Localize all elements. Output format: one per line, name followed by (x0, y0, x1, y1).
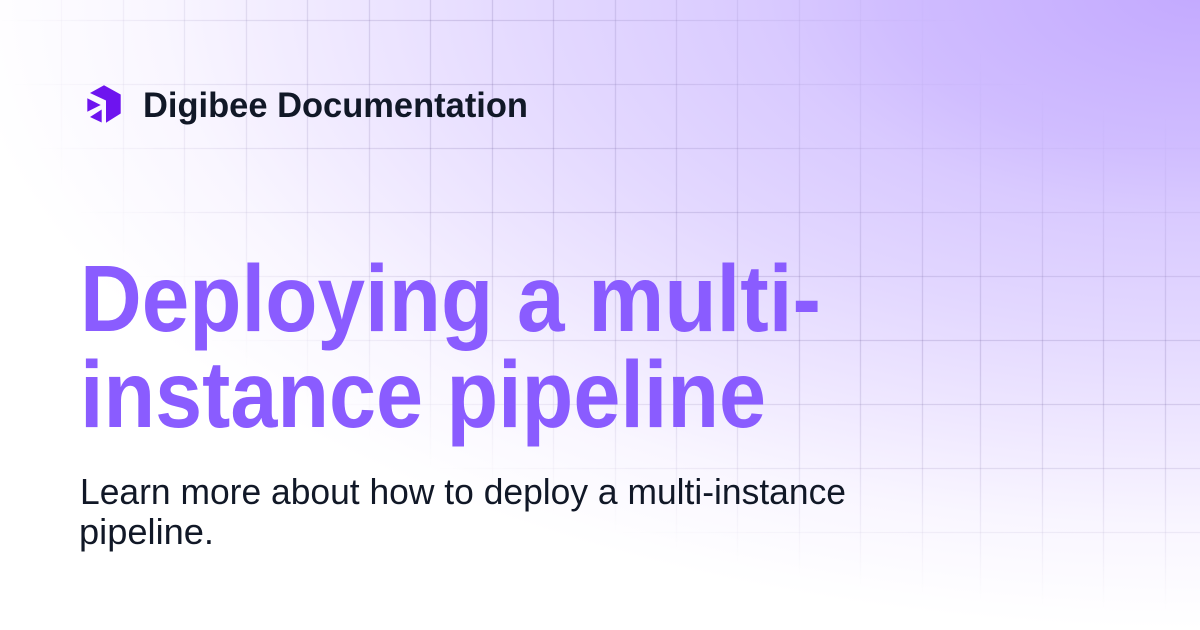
icon: Digibee logo (87, 85, 121, 123)
subtitle: Learn more about how to deploy a multi-instance (80, 471, 846, 512)
subtitle (79, 471, 846, 552)
subtitle: pipeline. (79, 511, 214, 552)
brand name: Digibee Documentation (143, 86, 528, 125)
title: instance pipeline (80, 342, 766, 448)
title: Deploying a multi- (80, 246, 821, 352)
title (80, 246, 821, 448)
